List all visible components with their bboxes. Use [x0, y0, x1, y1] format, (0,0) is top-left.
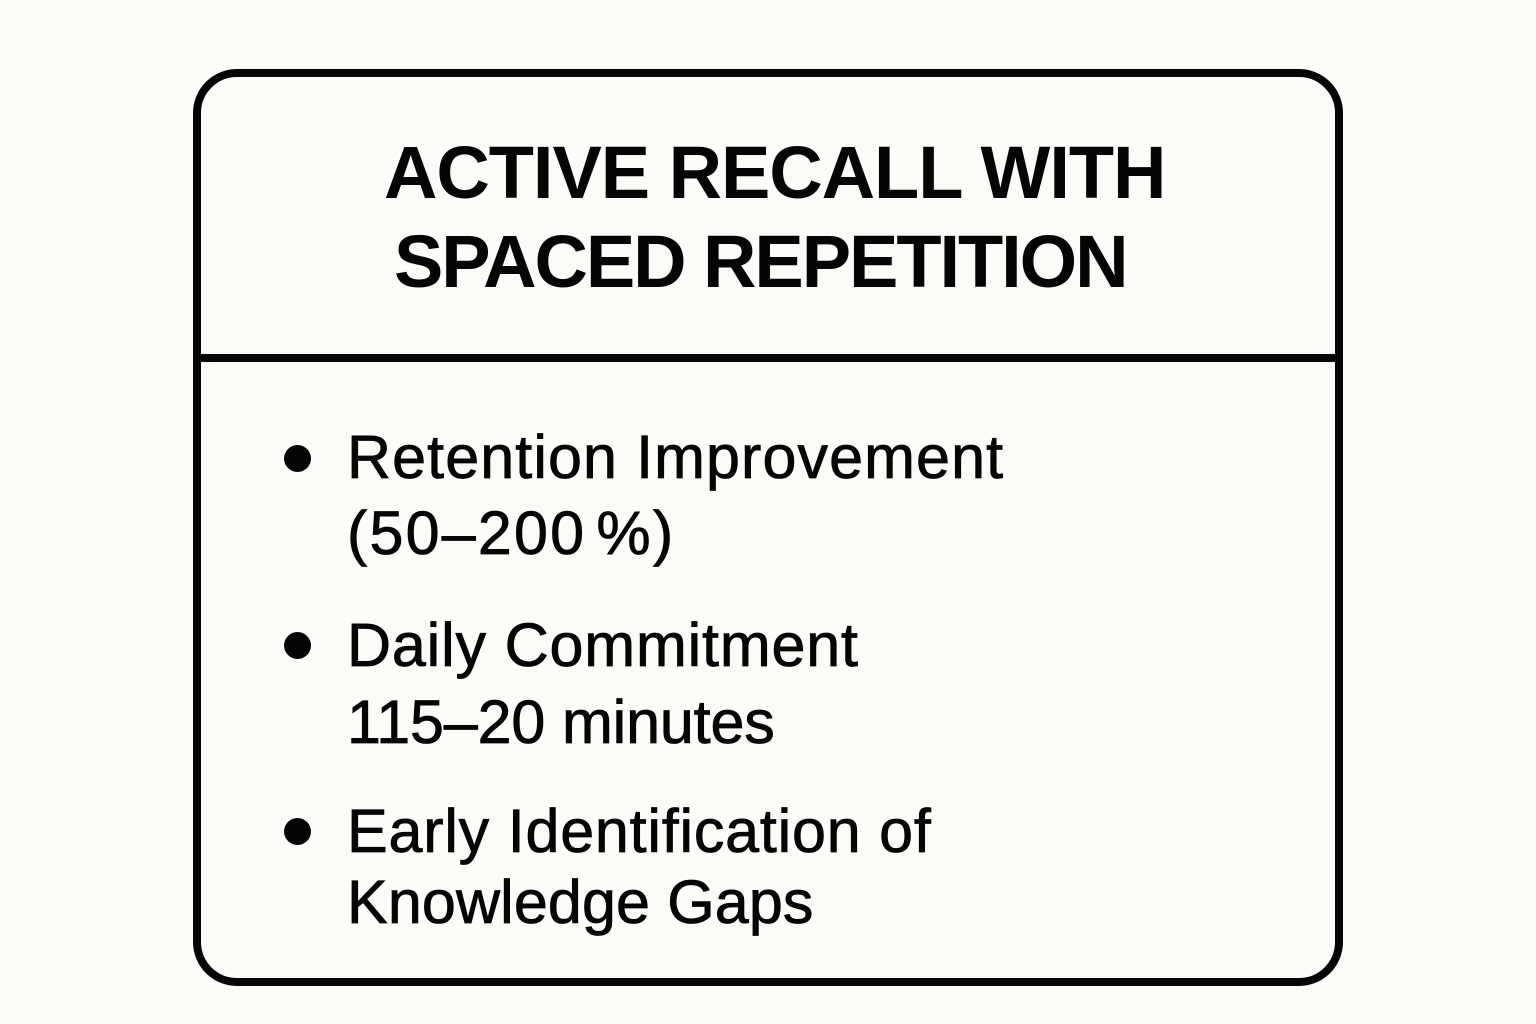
title: ACTIVE RECALL WITH [384, 131, 1165, 214]
title [384, 131, 1165, 303]
bullet icon 1 [284, 445, 311, 472]
text: early identification: Knowledge Gaps [347, 868, 814, 936]
text: daily commitment: Daily Commitment [347, 611, 859, 679]
text: early identification: Early Identification of [347, 797, 932, 865]
title: SPACED REPETITION [394, 220, 1126, 303]
bullet icon 2 [284, 632, 311, 659]
text: early identification [347, 797, 932, 936]
text: retention improvement: (50–200 %) [347, 499, 675, 567]
text: retention improvement [347, 423, 1004, 567]
text: daily commitment: 115–20 minutes [347, 688, 775, 756]
bullet icon 3 [284, 818, 311, 845]
panel: card [193, 69, 1343, 986]
text: retention improvement: Retention Improvement [347, 423, 1004, 491]
text: daily commitment [347, 611, 859, 756]
